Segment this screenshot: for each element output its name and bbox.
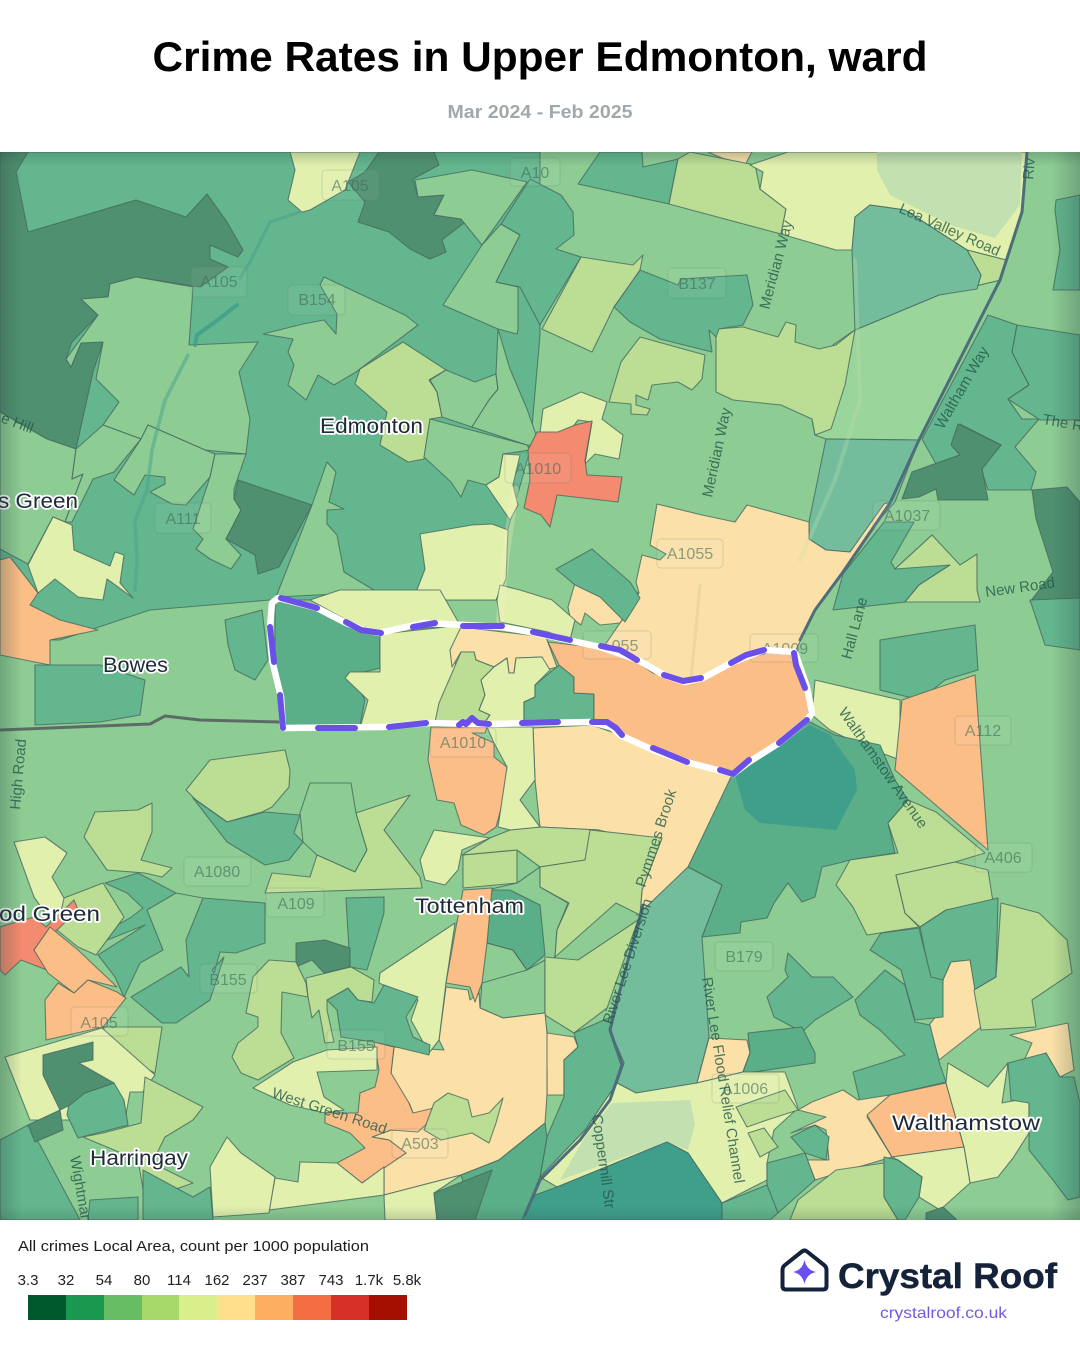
- place: Bowes: Bowes: [103, 654, 168, 677]
- street and waterway names: Pymmes Brook: [633, 787, 680, 889]
- street and waterway names: Wightman: [66, 1155, 95, 1224]
- street and waterway names: Hall Lane: [838, 595, 871, 661]
- road: A503: A503: [401, 1136, 439, 1153]
- road: A111: [155, 503, 211, 533]
- road: A109: A109: [277, 896, 315, 913]
- road: A10: A10: [521, 165, 549, 182]
- road: A1009: A1009: [762, 641, 808, 658]
- title: Crime Rates in Upper Edmonton, ward: [152, 33, 927, 80]
- ward polygons coloured by crime rate: [0, 152, 1080, 1220]
- wordmark: Crystal Roof: [838, 1257, 1057, 1296]
- street and waterway names: Walthamstow Avenue: [835, 705, 931, 832]
- road: A503: [392, 1129, 448, 1158]
- Walthamstow orange ward: [867, 1083, 964, 1157]
- icon: house with star: [782, 1250, 826, 1290]
- place: Walthamstow: Walthamstow: [892, 1112, 1041, 1135]
- road: A1080: A1080: [194, 864, 240, 881]
- road: B154: [288, 285, 345, 315]
- road: A1037: [873, 501, 940, 530]
- legend scale labels: 3.3: [18, 1272, 38, 1289]
- streams and river lines: [0, 152, 1027, 1215]
- legend scale labels: 1.7k: [355, 1272, 384, 1289]
- road: A109: [266, 888, 324, 917]
- legend title: All crimes Local Area, count per 1000 population: [18, 1238, 369, 1255]
- target ward interior neighbourhoods: [275, 600, 380, 728]
- road: A105 north: A105: [331, 178, 369, 195]
- road: A1010: A1010: [515, 461, 561, 478]
- highest-crime area near A1010: [524, 421, 622, 527]
- place: Palmers Green: s Green: [0, 490, 78, 513]
- legend colour bar: [28, 1295, 407, 1320]
- road: A1055: A1055: [667, 546, 713, 563]
- street and waterway names: River Lee Flood Relief Channel: [698, 976, 747, 1185]
- ward boundary: Upper Edmonton: [270, 598, 812, 774]
- road: A105 west: A105: [200, 274, 238, 291]
- street and waterway names: Meridian Way: [756, 218, 797, 311]
- road: B179: B179: [725, 949, 763, 966]
- road shields: [71, 158, 1032, 1158]
- road: B137: [668, 268, 726, 298]
- road: B155 south: [327, 1030, 385, 1059]
- website url: crystalroof.co.uk: [880, 1305, 1008, 1322]
- road: A1055: [657, 539, 723, 568]
- reservoir: [735, 725, 857, 830]
- legend scale labels: 162: [204, 1272, 230, 1289]
- choropleth map: [0, 152, 1080, 1224]
- street and waterway names: [0, 157, 1080, 1224]
- place: Tottenham: Tottenham: [415, 895, 524, 918]
- highest-rate ward section: [548, 642, 812, 773]
- road: B154: B154: [298, 292, 336, 309]
- legend scale labels: 114: [167, 1272, 191, 1289]
- street and waterway names: Riv: [1020, 157, 1039, 180]
- road: B155: B155: [209, 972, 247, 989]
- road: A1037: A1037: [884, 508, 930, 525]
- road: A1006: A1006: [722, 1081, 768, 1098]
- road: B155 south: B155: [337, 1038, 375, 1055]
- legend scale labels: 743: [318, 1272, 344, 1289]
- legend scale labels: 80: [134, 1272, 150, 1289]
- legend scale labels: [18, 1272, 422, 1289]
- road: A1006: [712, 1074, 779, 1103]
- road: A1010 south: [430, 728, 496, 757]
- street and waterway names: River Lee Diversion: [600, 896, 656, 1026]
- legend scale labels: 32: [58, 1272, 74, 1289]
- legend scale labels: 387: [280, 1272, 306, 1289]
- map edge vignette: [0, 152, 1080, 1220]
- road: A10: [510, 158, 560, 186]
- road: A1080: [184, 857, 251, 886]
- legend: [18, 1238, 422, 1320]
- legend scale labels: 237: [242, 1272, 268, 1289]
- road: A1055 east: 055: [612, 638, 638, 655]
- street and waterway names: Coppermill Str: [588, 1113, 618, 1210]
- street and waterway names: Lea Valley Road: [896, 200, 1003, 260]
- road: A112: [955, 716, 1011, 745]
- street and waterway names: High Road: [7, 738, 30, 810]
- road: A1009: [750, 634, 818, 662]
- logo: Crystal Roof: [782, 1250, 1057, 1322]
- street and waterway names: Waltham Way: [932, 343, 993, 432]
- road: B179: [715, 942, 773, 971]
- road: B137: B137: [678, 276, 716, 293]
- place: Wood Green: od Green: [0, 903, 100, 926]
- road: A105 south: A105: [80, 1015, 118, 1032]
- road: A112: A112: [965, 723, 1001, 740]
- road: A105 south: [71, 1007, 128, 1036]
- street and waterway names: Meridian Way: [699, 406, 735, 499]
- legend scale labels: 5.8k: [393, 1272, 422, 1289]
- road: A111: A111: [166, 511, 201, 528]
- subtitle: date range: Mar 2024 - Feb 2025: [448, 102, 632, 122]
- road: A105 west: [191, 267, 247, 297]
- place names: [0, 415, 1041, 1170]
- road: A406: [975, 843, 1032, 872]
- road: B155: [200, 964, 257, 993]
- road: A1055 east: [583, 631, 651, 659]
- road: A406: A406: [984, 850, 1022, 867]
- road: A1010 south: A1010: [440, 735, 486, 752]
- road: A1010: [505, 453, 571, 483]
- legend scale labels: 54: [96, 1272, 112, 1289]
- street and waterway names: West Green Road: [270, 1085, 389, 1138]
- street and waterway names: New Road: [984, 574, 1056, 601]
- road: A105 north: [322, 170, 379, 200]
- place: Edmonton: Edmonton: [320, 415, 423, 438]
- place: Harringay: Harringay: [90, 1147, 189, 1170]
